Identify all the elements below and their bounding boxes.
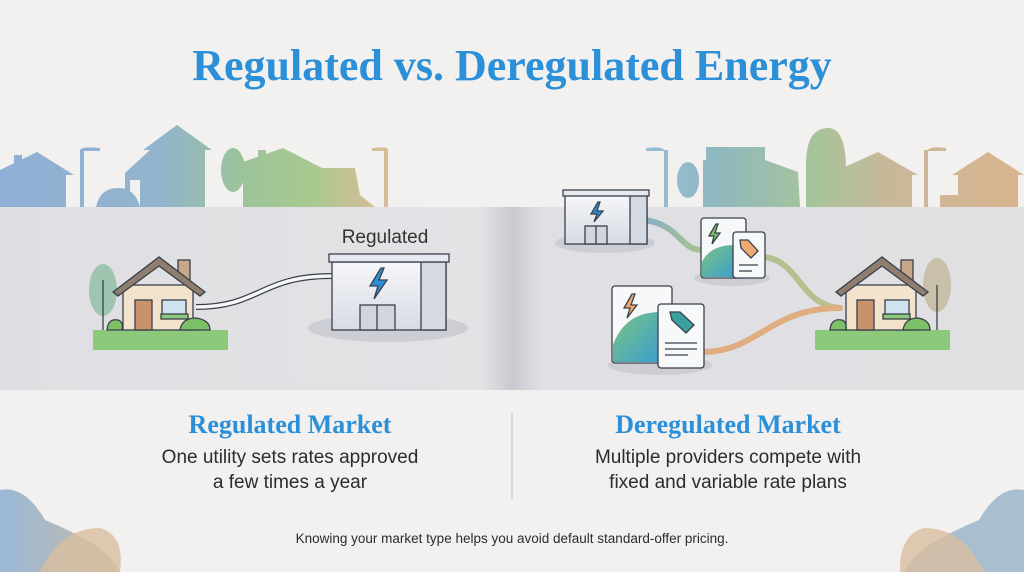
icon: house deregulated [815, 257, 951, 350]
skyline left [0, 125, 388, 207]
bottom corner blobs [0, 489, 120, 572]
text block: deregulated market: fixed and variable rate plans [609, 472, 847, 493]
text block: regulated market: a few times a year [213, 472, 367, 493]
text block: deregulated market: Deregulated Market [615, 410, 841, 439]
text block: regulated market [162, 410, 418, 493]
skyline right [646, 128, 1024, 207]
footer note: Knowing your market type helps you avoid default standard-offer pricing. [296, 531, 728, 546]
title: Regulated vs. Deregulated Energy [192, 41, 832, 90]
text block: regulated market: One utility sets rates approved [162, 447, 418, 468]
icon: house regulated [89, 257, 228, 350]
icon: provider card large [608, 286, 712, 375]
text block: deregulated market [595, 410, 861, 493]
label: Regulated: Regulated [342, 227, 428, 248]
icon: provider building [555, 190, 655, 253]
panel: deregulated illustration [555, 189, 951, 375]
icon: provider card small [694, 218, 770, 286]
divider [511, 413, 513, 500]
panel: regulated illustration [89, 227, 468, 350]
cable [196, 276, 332, 307]
text block: regulated market: Regulated Market [189, 410, 391, 439]
icon: utility building [308, 254, 468, 342]
cables [645, 220, 840, 352]
text block: deregulated market: Multiple providers compete with [595, 447, 861, 468]
panel band [0, 207, 1024, 390]
